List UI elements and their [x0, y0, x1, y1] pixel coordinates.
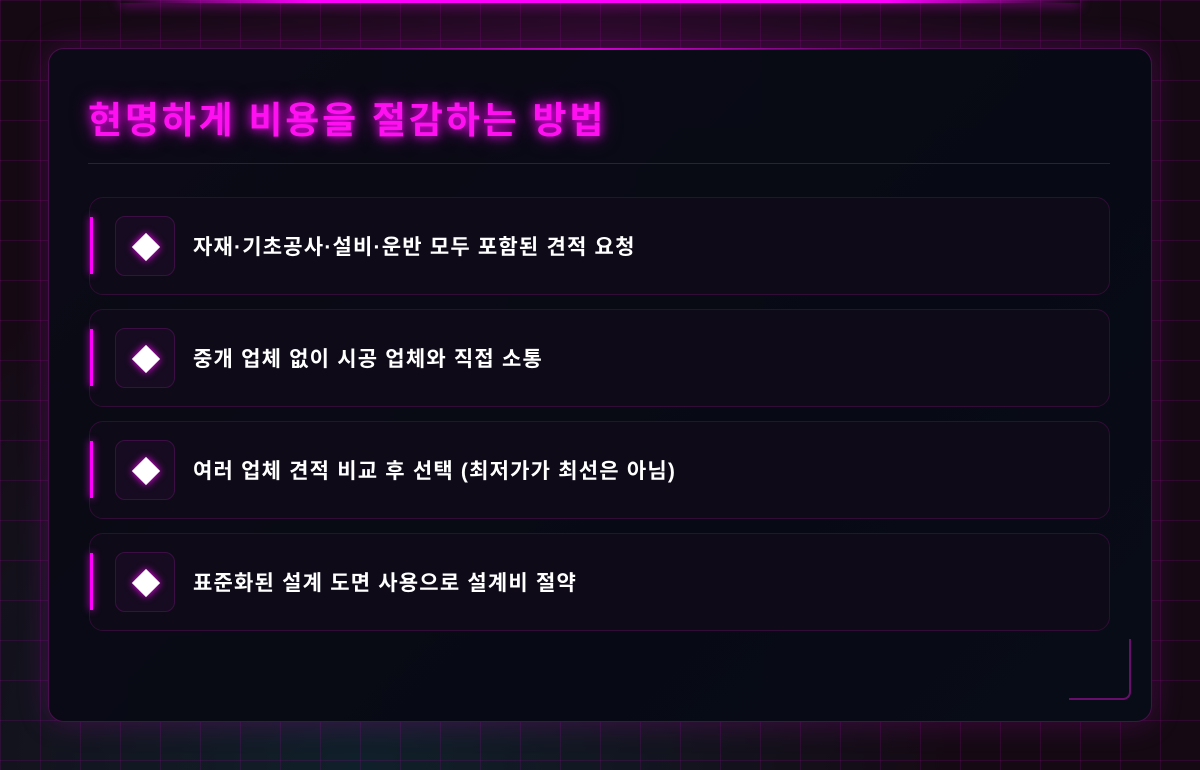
icon: diamond — [115, 440, 175, 500]
item 4 — [89, 533, 1110, 631]
icon: diamond — [115, 216, 175, 276]
item 3 — [89, 421, 1110, 519]
item 1 — [89, 197, 1110, 295]
item 2 — [89, 309, 1110, 407]
text: 중개 업체 없이 시공 업체와 직접 소통 — [193, 348, 543, 371]
corner bracket — [1069, 639, 1131, 700]
text: 여러 업체 견적 비교 후 선택 (최저가가 최선은 아님) — [193, 460, 676, 483]
icon: diamond — [115, 552, 175, 612]
text: 자재·기초공사·설비·운반 모두 포함된 견적 요청 — [193, 236, 636, 259]
icon: diamond — [115, 328, 175, 388]
title: 현명하게 비용을 절감하는 방법 — [88, 100, 606, 141]
text: 표준화된 설계 도면 사용으로 설계비 절약 — [193, 572, 577, 595]
